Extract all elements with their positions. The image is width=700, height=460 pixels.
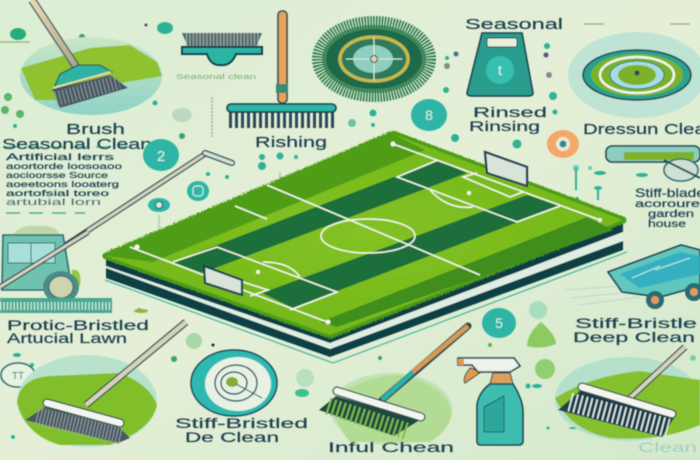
long handle tool [0,153,232,288]
heading: Brush: Brush [66,121,125,138]
icon: teal bottle: t [498,62,502,78]
icon: cleaning machine [0,226,112,313]
heading: De Clean: De Clean [185,429,279,445]
fuzzy grass edge [106,134,623,335]
icon: small badge [187,181,209,201]
text block: left description: aoeetoons looaterg [6,179,119,189]
badge: 5: 5 [495,315,503,331]
badge: 5 [482,308,516,338]
text block: left description [6,152,122,208]
playing surface [106,134,623,335]
icon: orange ring [547,130,579,158]
turf field [105,134,627,363]
icon: rake [227,11,336,120]
teal base line [105,252,627,363]
badge: 2: 2 [157,148,165,165]
text block: left description: aoortorde loosoaoo [6,161,122,171]
small dashes [0,24,690,235]
heading: Seasonal: Seasonal [465,16,563,33]
text block: left description: Artificial lerrs [6,152,114,163]
icon: flat brush head [176,33,262,81]
text block: left description: artubial lorn [6,197,101,208]
panel: bottom-right broom [555,347,700,441]
heading: Artucial Lawn: Artucial Lawn [7,331,127,346]
text block: left description: aocioorsse Source [6,170,108,180]
heading: Rinsing: Rinsing [469,118,540,134]
icon: small ring [148,198,170,212]
panel: top-left brush [20,0,162,115]
heading: Dressun Clean: Dressun Clean [583,122,700,138]
text block: right description: house [648,219,687,230]
pitch lines [130,144,600,322]
icon: target [191,350,277,416]
icon: radial brush [319,23,429,95]
heading: Stiff-Bristled: Stiff-Bristled [175,415,308,431]
goal near [204,266,242,295]
heading: Inful Chean: Inful Chean [328,439,454,455]
panel: dress circle [568,32,700,118]
heading: Stiff-Bristle: Stiff-Bristle [575,315,697,331]
text block: right description: Stiff-blade [635,186,700,200]
pitch spots [134,142,602,324]
icon: green drop [527,322,556,348]
mowing stripes [106,134,425,262]
badge: 2 [143,139,179,171]
text block: right description: garden [648,209,694,220]
badge: 8: 8 [425,107,433,123]
heading: Deep Clean: Deep Clean [573,329,695,345]
heading: Seasonal Clean: Seasonal Clean [2,136,152,153]
text block: left description: aortofsial toreo [6,188,109,198]
icon: ringed badge [1,363,35,387]
heading: Rishing: Rishing [255,134,327,151]
field base layers [106,238,623,357]
panel: bottom-left broom [17,322,186,447]
icon: flat brush head: Seasonal clean [176,74,256,81]
icon: ringed badge: TT [12,371,24,382]
text block: right description: acoroure [635,199,700,210]
text block: right description [635,186,700,230]
heading: Protic-Bristled: Protic-Bristled [7,318,149,333]
icon: cart [565,245,700,309]
icon: garden hose nozzle [606,146,700,181]
caption: Clean: Clean [638,439,697,455]
badge: 8 [411,99,447,131]
goal far [485,152,527,186]
icon: teal bottle [467,33,533,96]
heading: Rinsed: Rinsed [473,104,547,120]
panel: bottom-middle broom [319,326,468,445]
icon: spray bottle [458,358,523,445]
